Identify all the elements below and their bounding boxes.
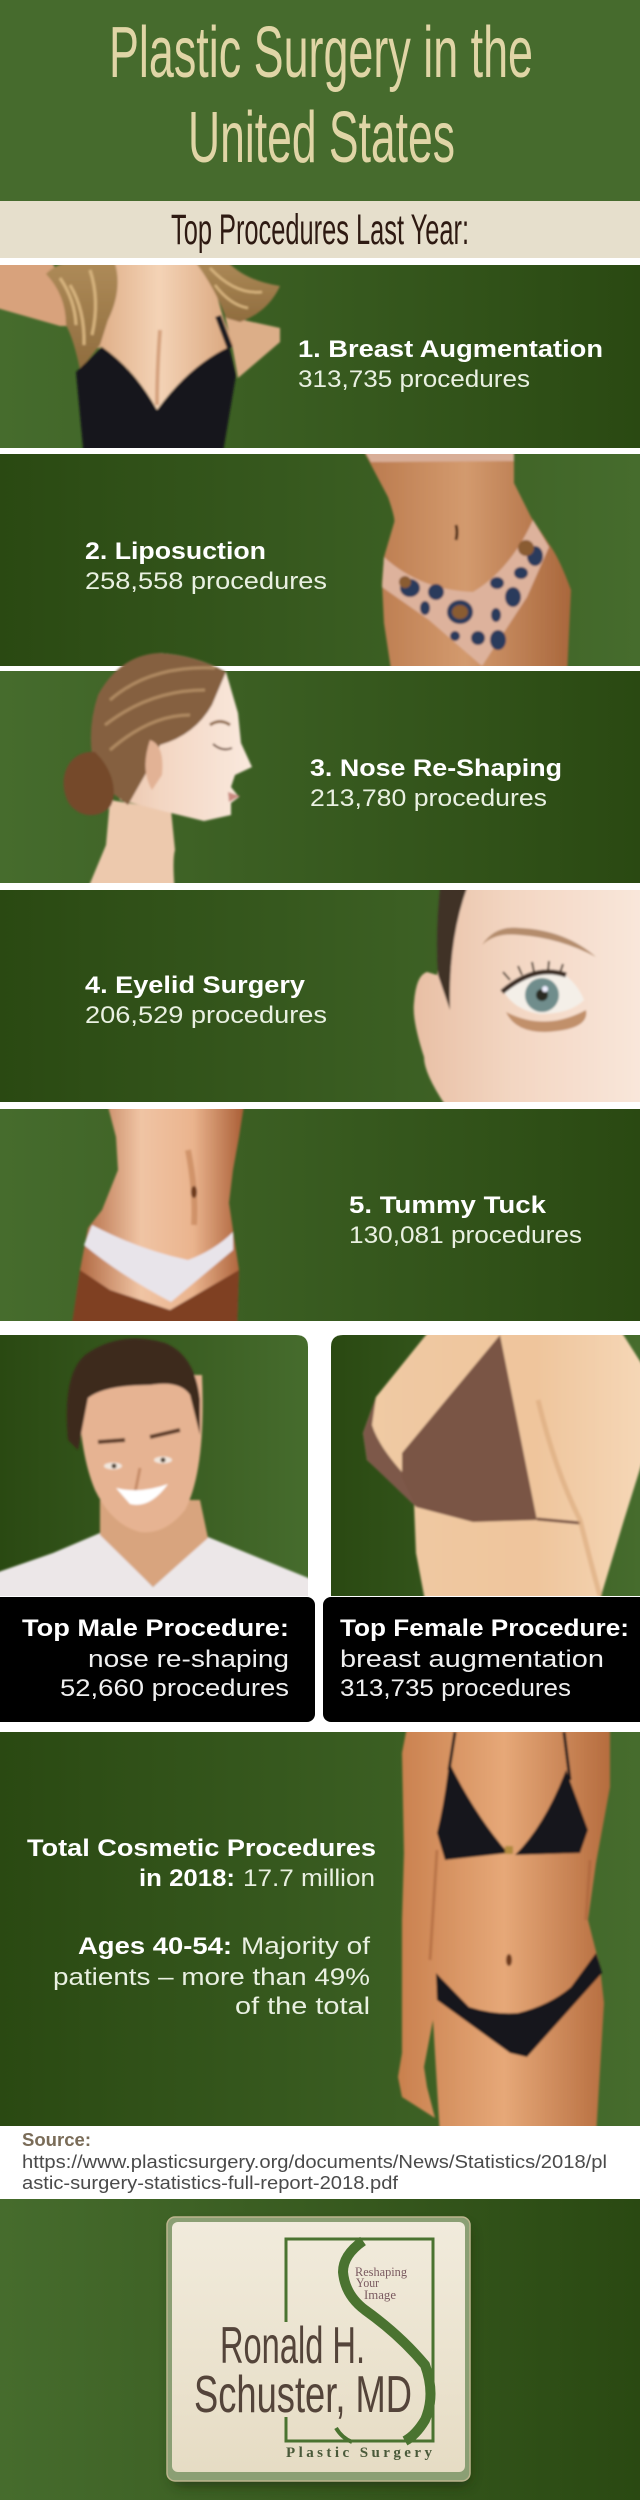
source note [0,2126,640,2199]
text: procedure 5: 130,081 procedures [349,1222,582,1249]
footer band [0,2199,640,2500]
text: procedure 5: 5. Tummy Tuck [349,1192,546,1219]
text: procedure 3 [310,755,562,812]
logo: Ronald H. Schuster, MD: Plastic Surgery [286,2445,432,2461]
logo: Ronald H. Schuster, MD: Image [364,2287,396,2302]
source note: astic-surgery-statistics-full-report-2018.pdf [22,2173,399,2193]
logo: Ronald H. Schuster, MD: Schuster, MD [194,2366,412,2424]
text: patient ages [53,1933,370,2020]
text: procedure 4: 4. Eyelid Surgery [85,972,305,999]
panel: eyelid surgery [0,880,640,1112]
text: total procedures: 17.7 million [243,1865,375,1892]
panel: nose re-shaping [0,653,640,893]
photo: woman in profile [64,653,252,893]
text: procedure 4: 206,529 procedures [85,1002,327,1029]
text: procedure 2 [85,538,327,595]
logo: Ronald H. Schuster, MD: Ronald H. [220,2317,365,2375]
subtitle band [0,201,640,258]
panel: totals [0,1722,640,2136]
photo: woman's face close-up [414,880,640,1112]
photo: torso in white briefs [71,1099,245,1331]
text: procedure 2: 2. Liposuction [85,538,266,565]
label: top female procedure: breast augmentation [340,1646,604,1673]
text: patient ages: Ages 40-54: [78,1933,232,1960]
source note: Source: [22,2130,91,2150]
text: procedure 5 [349,1192,582,1249]
title line 2: United States [188,98,455,178]
text: procedure 1: 313,735 procedures [298,366,530,393]
text: patient ages: patients – more than 49% [53,1964,370,1991]
text: procedure 3: 3. Nose Re-Shaping [310,755,562,782]
panel: top female procedure [331,1325,640,1606]
label: top female procedure [323,1597,640,1722]
label: top female procedure: 313,735 procedures [340,1675,571,1702]
panel: liposuction [0,444,640,676]
text: patient ages: Majority of [241,1933,370,1960]
title banner [0,0,640,201]
label: top male procedure [0,1597,315,1722]
text: procedure 2: 258,558 procedures [85,568,327,595]
photo: woman in black bikini [398,1722,610,2136]
label: top male procedure: nose re-shaping [88,1646,289,1673]
logo: Ronald H. Schuster, MD: Reshaping [355,2264,407,2279]
photo: woman in brown bikini top [363,1325,640,1606]
logo: Ronald H. Schuster, MD [167,2217,470,2486]
text: patient ages: of the total [235,1993,370,2020]
label: top male procedure: 52,660 procedures [60,1675,289,1702]
logo: Ronald H. Schuster, MD: Your [356,2275,380,2290]
panel: top male procedure [0,1335,318,1606]
text: total procedures: in 2018: [139,1865,235,1892]
photo: smiling man [0,1339,318,1606]
text: procedure 1 [298,336,603,393]
text: total procedures: Total Cosmetic Procedures [27,1835,376,1862]
panel: breast augmentation [0,255,640,458]
label: top female procedure: Top Female Procedure: [340,1615,629,1642]
photo: woman in black top [0,255,280,458]
text: procedure 1: 1. Breast Augmentation [298,336,603,363]
photo: torso in leopard bikini [360,444,571,676]
text: total procedures [27,1835,376,1892]
text: procedure 4 [85,972,327,1029]
panel: tummy tuck [0,1099,640,1331]
text: procedure 3: 213,780 procedures [310,785,547,812]
label: top male procedure: Top Male Procedure: [22,1615,289,1642]
source note: https://www.plasticsurgery.org/documents/News/Statistics/2018/pl [22,2152,607,2172]
